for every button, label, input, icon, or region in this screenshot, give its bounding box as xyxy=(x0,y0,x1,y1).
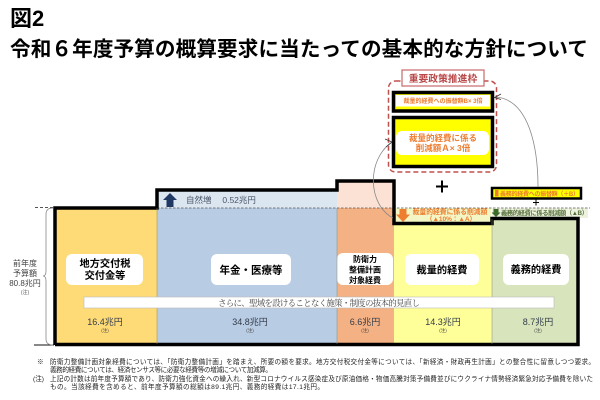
panel: mandatory block: (注) xyxy=(534,327,542,334)
panel: defense block: 対象経費 xyxy=(349,275,381,285)
reduction box: 削減額Ａ× 3倍 xyxy=(416,143,471,153)
review band xyxy=(84,297,554,308)
dashed baseline xyxy=(157,207,590,209)
panel: defense block xyxy=(337,208,394,344)
panel: pension and medical block xyxy=(157,208,337,344)
panel: mandatory block: 義務的経費 xyxy=(511,263,561,276)
icon: plus small xyxy=(533,200,539,206)
panel: pension and medical block: (注) xyxy=(246,327,254,334)
panel: pension and medical block: 34.8兆円 xyxy=(232,317,268,327)
title: 令和６年度予算の概算要求に当たっての基本的な方針について xyxy=(10,38,588,61)
panel: local allocation tax block: 交付金等 xyxy=(85,269,125,282)
icon: small orange arrow xyxy=(495,190,498,196)
arrow: discretionary reduction to priority frame xyxy=(373,139,393,218)
panel: defense block: 整備計画 xyxy=(349,264,381,274)
natural increase label: 自然増 0.52兆円 xyxy=(186,195,256,205)
icon: up arrow xyxy=(163,193,177,207)
panel: reduction strip mandatory xyxy=(492,208,588,218)
panel: pension and medical block: 年金・医療等 xyxy=(220,264,283,276)
panel: discretionary block xyxy=(394,224,492,344)
panel: reduction strip discretionary: （▲10%：▲A） xyxy=(426,215,476,223)
title xyxy=(10,6,588,61)
panel: prior-year budget bracket: 予算額 xyxy=(13,268,37,278)
chart outline xyxy=(55,181,578,345)
footnotes: (注) xyxy=(33,374,44,383)
icon: green down arrow xyxy=(492,209,500,217)
divider lines xyxy=(157,208,492,344)
footnotes: もの。当該経費を含めると、前年度予算額の総額は89.1兆円、義務的経費は17.1兆円。 xyxy=(50,382,324,391)
panel: defense block: (注) xyxy=(361,327,369,334)
footnotes: 義務的経費については、経済センサス等に必要な経費等の増減について加減算。 xyxy=(50,365,272,374)
panel: defense block: 6.6兆円 xyxy=(350,317,380,327)
panel: discretionary block: 裁量的経費 xyxy=(417,264,467,276)
panel: local allocation tax block: 16.4兆円 xyxy=(87,317,123,327)
panel: mandatory transfer box: 義務的経費への振替額（＋B） xyxy=(500,190,579,198)
reduction box xyxy=(394,118,492,166)
footnotes: ※ xyxy=(37,359,44,366)
footnotes xyxy=(33,357,595,391)
panel: discretionary block: (注) xyxy=(439,327,447,334)
panel: prior-year budget bracket: (注) xyxy=(21,289,29,296)
panel: local allocation tax block: 地方交付税 xyxy=(80,257,130,270)
review band: さらに、聖域を設けることなく施策・制度の抜本的見直し xyxy=(218,298,420,308)
arrow: mandatory transfer to priority frame xyxy=(494,94,538,187)
panel: mandatory block: 8.7兆円 xyxy=(523,317,553,327)
panel: reduction strip mandatory: 義務的経費に係る削減額（▲B） xyxy=(501,208,588,217)
heading: priority policy: 重要政策推進枠 xyxy=(409,72,477,85)
panel: local allocation tax block xyxy=(55,208,157,344)
panel: mandatory transfer box xyxy=(492,188,581,198)
icon: plus large xyxy=(436,180,448,192)
panel: prior-year budget bracket: 前年度 xyxy=(13,258,37,268)
transfer box: 裁量的経費への振替額B× 3倍 xyxy=(404,97,482,105)
reduction box: 裁量的経費に係る xyxy=(409,133,477,143)
title: 図2 xyxy=(10,6,44,31)
panel: discretionary block: 14.3兆円 xyxy=(425,317,461,327)
panel: reduction strip discretionary: 裁量的経費に係る削減額 xyxy=(413,207,488,216)
icon: orange down arrow xyxy=(396,209,410,222)
panel: prior-year budget bracket xyxy=(9,208,54,345)
panel: defense top band xyxy=(337,181,394,208)
panel: prior-year budget bracket: 80.8兆円 xyxy=(9,278,41,288)
footnotes: 防衛力整備計画対象経費については、「防衛力整備計画」を踏まえ、所要の額を要求。地方交付税交付金等については、「新経済・財政再生計画」との整合性に留意しつつ要求。 xyxy=(50,357,595,366)
panel: natural increase band xyxy=(157,190,337,208)
panel: local allocation tax block: (注) xyxy=(101,327,109,334)
panel: defense block: 防衛力 xyxy=(353,254,377,264)
panel: mandatory block xyxy=(492,219,578,344)
footnotes: 上記の計数は前年度予算額であり、防衛力強化資金への繰入れ、新型コロナウイルス感染症及び原油価格・物価高騰対策予備費並びにウクライナ情勢経済緊急対応予備費を除いた xyxy=(50,374,593,383)
panel: reduction strip discretionary xyxy=(396,207,491,223)
panel: priority policy frame xyxy=(388,70,496,172)
